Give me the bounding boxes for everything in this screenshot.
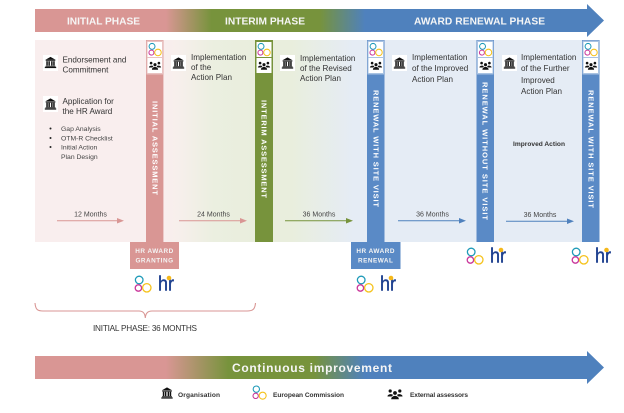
icon: organisation [171,55,186,71]
text: improved action: Improved Action [513,141,565,148]
logos: granting: hr [158,274,174,296]
heading: award renewal phase: AWARD RENEWAL PHASE [414,16,545,28]
bar: interim assessment [255,40,273,242]
text: revised plan: Action Plan [300,74,341,83]
continuous improvement arrow: Continuous improvement [232,361,392,375]
text: application: Application for [62,97,114,106]
panel: improved action plan [384,40,477,242]
bar: renewal with site visit: RENEWAL WITH SITE VISIT [372,90,380,207]
text: initial phase duration: INITIAL PHASE: 36 MONTHS [93,324,198,333]
legend: European Commission: European Commission [273,392,344,399]
text: further plan: Action Plan [521,87,562,96]
arrow: 36 months blue: 36 Months [416,212,449,218]
logos: without site visit: hr [490,246,506,268]
text: application: the HR Award [62,107,112,116]
bar: renewal with site visit [367,40,384,242]
logos: renewal: hr [380,274,396,296]
text: further plan: Implementation [521,53,576,62]
box: HR award renewal [351,242,400,269]
bar: renewal without site visit [476,40,494,242]
icon: organisation [43,96,58,112]
text: improved plan: Implementation [412,53,467,62]
bullet list: Plan Design [61,154,98,161]
text: implementation: Action Plan [191,73,232,82]
bar: initial assessment: INITIAL ASSESSMENT [150,101,160,195]
text: revised plan: Implementation [300,54,355,63]
icon: organisation [280,55,295,71]
arrow: 36 months blue: 36 Months [524,212,557,219]
top phase arrow [35,4,604,37]
text: improved plan: Action Plan [412,75,453,84]
text: revised plan: of the Revised [300,64,352,73]
arrow: 36 months blue [506,212,574,224]
legend [161,386,468,399]
heading: initial phase: INITIAL PHASE [67,16,140,28]
arrow: 36 months green [285,212,353,224]
logos: final renewal: hr [595,246,611,268]
heading: interim phase: INTERIM PHASE [225,16,305,28]
legend: external assessors [388,389,468,399]
bar: initial assessment [146,40,164,242]
arrow: 24 months [179,212,247,224]
box: HR award granting: HR AWARD [135,248,174,255]
legend: external assessors: External assessors [410,392,468,399]
box: HR award renewal: RENEWAL [358,258,393,264]
bullet list [50,126,113,161]
text: further plan: of the Further [521,64,570,73]
bullet list: Initial Action [61,144,97,152]
legend: organisation: Organisation [178,392,220,399]
icon: organisation [43,55,58,71]
icon: organisation [392,55,407,71]
icon: organisation [502,55,517,71]
text: implementation: of the [191,63,212,72]
text: implementation: Implementation [191,53,246,62]
bar: final renewal with site visit: RENEWAL WITH SITE VISIT [586,90,596,208]
arrow: 36 months green: 36 Months [303,212,336,218]
panel: action plan [164,40,255,242]
arrow: 36 months blue [398,212,466,224]
text: endorsement: Endorsement and [62,56,126,64]
panel: initial stage [35,40,146,242]
legend: organisation [161,387,220,399]
arrow: 12 months [57,212,124,224]
legend: European Commission [253,386,344,399]
bar: final renewal with site visit [582,40,600,242]
arrow: 24 months: 24 Months [197,212,230,218]
brace: initial phase span [35,303,256,318]
bullet list: Gap Analysis [61,126,101,133]
panel: revised action plan [273,40,367,242]
bar: renewal without site visit: RENEWAL WITHOUT SITE VISIT [481,82,490,220]
text: further plan: Improved [521,76,555,85]
arrow: 12 months: 12 Months [74,212,107,218]
logos: without site visit [467,246,506,268]
bullet list: OTM-R Checklist [61,136,113,142]
box: HR award granting [130,242,179,269]
continuous improvement arrow [35,351,604,384]
box: HR award granting: GRANTING [135,258,174,264]
panel: further improved action plan [494,40,582,242]
box: HR award renewal: HR AWARD [356,248,395,255]
bar: interim assessment: INTERIM ASSESSMENT [259,100,268,198]
text: endorsement: Commitment [62,66,109,74]
logos: renewal [357,274,396,296]
logos: final renewal [572,246,611,268]
logos: granting [135,274,174,296]
text: improved plan: of the Improved [412,64,468,73]
